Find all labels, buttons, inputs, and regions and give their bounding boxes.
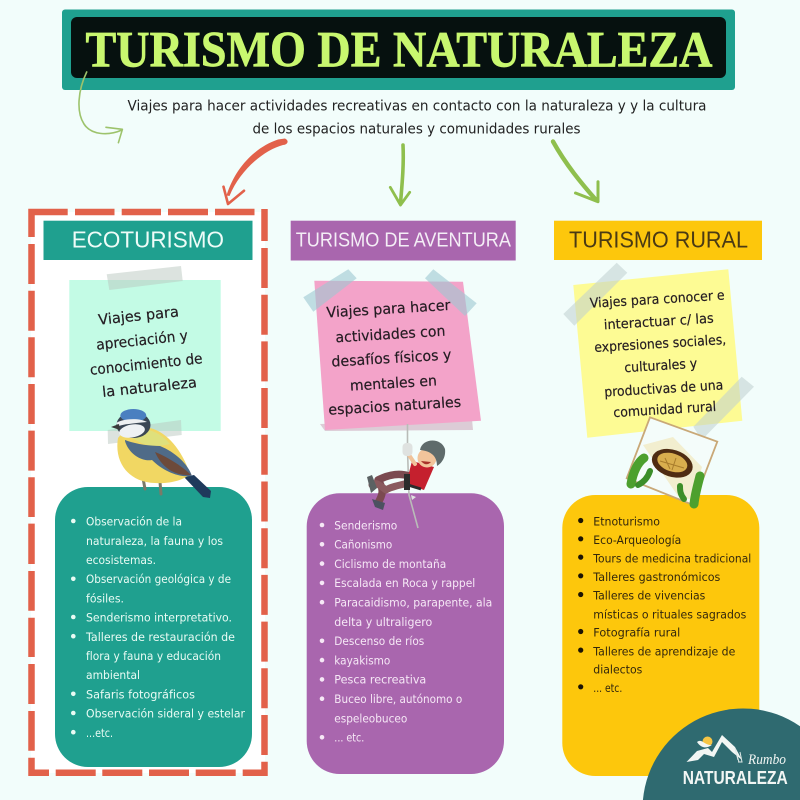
logo: Rumbo Naturaleza	[643, 708, 800, 800]
sticky note: rural	[563, 263, 754, 440]
list panel: aventura: kayakismo	[334, 653, 390, 667]
list panel: rural: Talleres de aprendizaje de	[592, 644, 735, 658]
list panel: ecoturismo: ambiental	[86, 668, 140, 682]
sticky note: aventura: actividades con	[335, 324, 446, 346]
list panel: aventura: Escalada en Roca y rappel	[334, 576, 475, 590]
list panel: aventura	[307, 493, 504, 774]
icon: food photo with cacti	[627, 417, 717, 505]
list panel: rural	[562, 495, 759, 776]
sticky note: aventura: Viajes para hacer	[326, 298, 451, 321]
heading: rural	[554, 221, 762, 260]
list panel: rural: Fotografía rural	[593, 626, 680, 640]
list panel: ecoturismo	[55, 487, 252, 767]
sticky note: rural: Viajes para conocer e	[589, 288, 725, 312]
list panel: aventura: Senderismo	[334, 518, 397, 532]
arrow: small green curved	[79, 72, 122, 143]
sticky note: ecoturismo	[69, 266, 221, 444]
panel: ecoturismo	[31, 209, 265, 773]
sticky note: ecoturismo: Viajes para	[97, 304, 180, 329]
sticky note: rural: expresiones sociales,	[594, 332, 727, 356]
list panel: ecoturismo: Observación geológica y de	[86, 572, 231, 586]
list panel: aventura: Cañonismo	[334, 538, 392, 552]
list panel: rural: Tours de medicina tradicional	[592, 551, 751, 565]
arrow: green to aventura	[390, 145, 410, 205]
heading: rural: TURISMO RURAL	[569, 226, 748, 252]
list panel: rural: Talleres gastronómicos	[592, 570, 720, 584]
list panel: aventura: Ciclismo de montaña	[334, 557, 446, 571]
logo: Rumbo Naturaleza: Rumbo	[747, 752, 786, 768]
heading: ecoturismo: ECOTURISMO	[72, 227, 224, 253]
list panel: rural: Talleres de vivencias	[592, 589, 705, 603]
sticky note: ecoturismo: la naturaleza	[102, 375, 198, 401]
title banner	[62, 10, 735, 90]
list panel: aventura: Descenso de ríos	[334, 634, 424, 648]
list panel: ecoturismo: naturaleza, la fauna y los	[86, 534, 223, 548]
panel: turismo rural	[554, 221, 762, 776]
sticky note: rural: culturales y	[624, 356, 698, 376]
sticky note: rural: interactuar c/ las	[603, 311, 714, 333]
list panel: aventura: ... etc.	[334, 731, 364, 745]
icon: bird	[111, 409, 211, 498]
list panel: ecoturismo: ...etc.	[86, 726, 113, 740]
list panel: aventura: delta y ultraligero	[334, 615, 432, 629]
sticky note: aventura: desafíos físicos y	[331, 347, 452, 371]
list panel: ecoturismo: ecosistemas.	[86, 553, 156, 567]
list panel: aventura: espeleobuceo	[334, 711, 407, 725]
title banner: TURISMO DE NATURALEZA	[86, 23, 713, 79]
list panel: rural: Eco-Arqueología	[593, 533, 681, 547]
list panel: ecoturismo: flora y fauna y educación	[86, 649, 221, 663]
icon: climber on rope	[367, 424, 445, 528]
list panel: ecoturismo: Observación sideral y estelar	[86, 707, 245, 721]
arrow: green to rural	[553, 142, 598, 202]
sticky note: rural: productivas de una	[604, 377, 724, 401]
list panel: rural: Etnoturismo	[593, 515, 660, 529]
icon: mountain and sun	[686, 735, 742, 762]
arrow: red to ecoturismo	[224, 138, 288, 204]
subtitle text: Viajes para hacer actividades recreativas en contacto con la naturaleza y y la cultura	[128, 99, 706, 115]
list panel: aventura: Buceo libre, autónomo o	[334, 692, 462, 706]
heading: ecoturismo	[44, 221, 252, 260]
sticky note: aventura: mentales en	[350, 373, 437, 395]
list panel: aventura: Paracaidismo, parapente, ala	[334, 596, 492, 610]
list panel: ecoturismo: Senderismo interpretativo.	[86, 611, 232, 625]
sticky note: ecoturismo: conocimiento de	[89, 351, 203, 379]
subtitle text: de los espacios naturales y comunidades rurales	[252, 121, 580, 137]
sticky note: aventura	[303, 269, 481, 431]
subtitle text	[128, 99, 706, 137]
list panel: rural: ... etc.	[593, 681, 622, 695]
list panel: rural: dialectos	[593, 663, 642, 677]
list panel: rural: místicas o rituales sagrados	[593, 607, 746, 621]
sticky note: ecoturismo: apreciación y	[95, 328, 189, 354]
red dashed frame	[32, 209, 264, 773]
list panel: ecoturismo: fósiles.	[86, 591, 124, 605]
panel: turismo de aventura	[291, 221, 516, 774]
list panel: ecoturismo: Talleres de restauración de	[85, 630, 235, 644]
list panel: ecoturismo: Observación de la	[86, 515, 182, 529]
heading: aventura: TURISMO DE AVENTURA	[296, 228, 511, 252]
heading: aventura	[291, 221, 516, 260]
list panel: aventura: Pesca recreativa	[334, 673, 426, 687]
sticky note: rural: comunidad rural	[613, 399, 717, 421]
list panel: ecoturismo: Safaris fotográficos	[86, 687, 195, 701]
sticky note: aventura: espacios naturales	[328, 395, 462, 419]
